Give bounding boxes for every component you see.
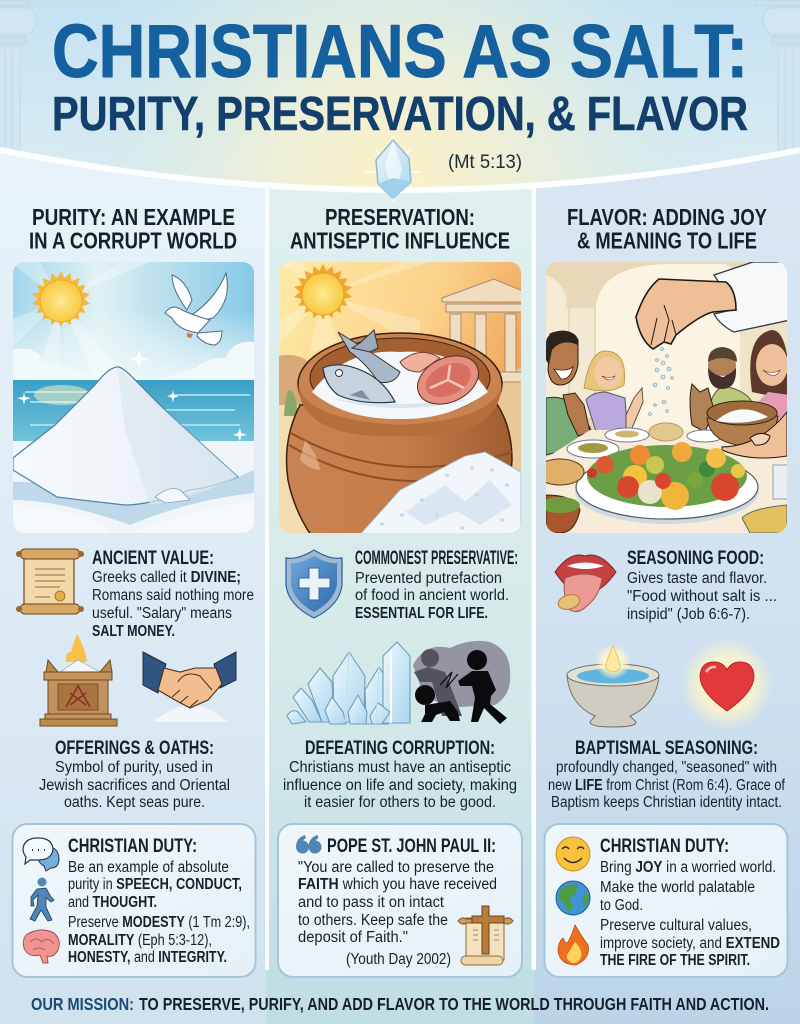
text: offerings and oaths: Symbol of purity, used in bbox=[55, 759, 213, 776]
panel: christian duty, flavor: Make the world palatable bbox=[600, 879, 755, 896]
panel: christian duty, purity: MORALITY (Eph 5:3-12), bbox=[68, 932, 212, 949]
text: defeating corruption bbox=[283, 738, 517, 811]
text: commonest preservative: COMMONEST PRESERVATIVE: bbox=[355, 548, 518, 569]
person left bbox=[546, 330, 592, 456]
icon: smiley bbox=[556, 837, 590, 871]
icon: baptismal font with flame bbox=[567, 644, 659, 727]
bearded man bbox=[690, 347, 752, 432]
column headings: & MEANING TO LIFE bbox=[577, 228, 757, 254]
dove bbox=[165, 273, 227, 345]
falling salt bbox=[648, 348, 673, 416]
sparkles bbox=[17, 350, 247, 442]
panel: pope quote: (Youth Day 2002) bbox=[346, 951, 451, 968]
column headings: IN A CORRUPT WORLD bbox=[29, 228, 237, 254]
clay pot bbox=[286, 404, 513, 533]
icon: glowing heart bbox=[681, 638, 773, 730]
text: commonest preservative: ESSENTIAL FOR LIFE. bbox=[355, 605, 488, 622]
text: seasoning food: "Food without salt is ... bbox=[627, 588, 777, 605]
text: defeating corruption: it easier for others to be good. bbox=[304, 794, 496, 811]
column headings: PRESERVATION: bbox=[325, 204, 475, 230]
side dishes bbox=[546, 458, 584, 486]
text: ancient value bbox=[92, 548, 254, 640]
panel: christian duty, flavor: Preserve cultural values, bbox=[600, 917, 752, 934]
table bbox=[546, 430, 787, 533]
column headings bbox=[29, 204, 767, 254]
salt bowl and hand bbox=[707, 401, 787, 458]
text: seasoning food: Gives taste and flavor. bbox=[627, 570, 767, 587]
icon: corruption figures bbox=[413, 641, 510, 724]
panel: pope quote: "You are called to preserve the bbox=[298, 859, 494, 876]
panel: christian duty, purity bbox=[12, 824, 256, 977]
icon: ancient scroll bbox=[16, 549, 84, 614]
icon: tongue with bread bbox=[555, 555, 616, 612]
text: ancient value: SALT MONEY. bbox=[92, 623, 175, 640]
panel: christian duty, purity: Preserve MODESTY (1 Tm 2:9), bbox=[68, 914, 250, 931]
panel: pope quote bbox=[278, 824, 522, 977]
icon: salt crystals bbox=[287, 642, 410, 724]
clouds bbox=[13, 342, 254, 379]
panel: christian duty, flavor: CHRISTIAN DUTY: bbox=[600, 836, 729, 857]
text: seasoning food: insipid" (Job 6:6-7). bbox=[627, 606, 750, 623]
icon: walking person bbox=[30, 878, 54, 921]
blonde woman bbox=[584, 351, 643, 440]
salt heap bbox=[360, 452, 521, 533]
text: offerings and oaths: Jewish sacrifices and Oriental bbox=[39, 777, 230, 794]
shore and puddle bbox=[13, 441, 254, 533]
text: offerings and oaths: oaths. Kept seas pure. bbox=[64, 794, 205, 811]
panel: christian duty, purity: HONESTY, and INTEGRITY. bbox=[68, 949, 227, 966]
text: defeating corruption: Christians must have an antiseptic bbox=[289, 759, 511, 776]
fish bbox=[323, 330, 400, 403]
panel: pope quote: FAITH which you have received bbox=[298, 876, 497, 893]
text: ancient value: Greeks called it DIVINE; bbox=[92, 569, 241, 586]
icon: salt crystal bbox=[365, 136, 421, 202]
panel: christian duty, purity: purity in SPEECH, CONDUCT, bbox=[68, 876, 242, 893]
footer: mission statement: OUR MISSION: bbox=[31, 994, 134, 1014]
text: ancient value: useful. "Salary" means bbox=[92, 605, 232, 622]
decorative columns bbox=[0, 0, 800, 156]
sea bbox=[13, 380, 254, 444]
panel: christian duty, purity: Be an example of absolute bbox=[68, 859, 229, 876]
woman right bbox=[750, 330, 790, 425]
panel: christian duty, flavor bbox=[544, 824, 788, 977]
text: baptismal seasoning bbox=[548, 738, 786, 811]
panel: preservation pot bbox=[279, 262, 526, 545]
temple bbox=[442, 279, 526, 382]
desert bbox=[279, 355, 308, 405]
hand and sleeve bbox=[636, 262, 795, 349]
text: offerings and oaths bbox=[39, 738, 230, 811]
panel: pope quote: to others. Keep safe the bbox=[298, 912, 448, 929]
icon: cross and scroll bbox=[458, 906, 513, 965]
panel: christian duty, flavor: to God. bbox=[600, 897, 643, 914]
column headings: ANTISEPTIC INFLUENCE bbox=[290, 228, 510, 254]
header banner bbox=[0, 0, 800, 190]
panel: christian duty, purity: CHRISTIAN DUTY: bbox=[68, 836, 197, 857]
icon: altar with salt bbox=[40, 634, 117, 726]
meat bbox=[399, 352, 479, 405]
panel: christian duty, flavor: THE FIRE OF THE SPIRIT. bbox=[600, 952, 750, 969]
text: ancient value: Romans said nothing more bbox=[92, 587, 254, 604]
sun bbox=[32, 271, 90, 327]
panel: christian duty, purity: and THOUGHT. bbox=[68, 894, 157, 911]
panel: salt mountain by the sea bbox=[10, 262, 254, 533]
panel: seasoning the meal bbox=[536, 262, 795, 533]
sun bbox=[294, 264, 352, 320]
icon: globe bbox=[556, 881, 590, 915]
text: seasoning food bbox=[627, 548, 777, 623]
icon: flame bbox=[558, 925, 588, 965]
text: commonest preservative bbox=[355, 548, 518, 622]
panel: christian duty, flavor: improve society, and EXTEND bbox=[600, 935, 780, 952]
text: defeating corruption: DEFEATING CORRUPTION: bbox=[305, 738, 495, 759]
icon: speech bubbles bbox=[23, 838, 59, 871]
icon: brain bbox=[23, 930, 59, 963]
icon: quotation marks bbox=[296, 835, 322, 854]
panel: pope quote: and to pass it on intact bbox=[298, 894, 445, 911]
icon: handshake over salt bbox=[143, 652, 236, 722]
panel: pope quote: deposit of Faith." bbox=[298, 929, 408, 946]
column headings: PURITY: AN EXAMPLE bbox=[32, 204, 235, 230]
salt pile bbox=[13, 367, 238, 505]
panel: christian duty, flavor: Bring JOY in a worried world. bbox=[600, 859, 776, 876]
text: defeating corruption: influence on life and society, making bbox=[283, 777, 517, 794]
text: offerings and oaths: OFFERINGS & OATHS: bbox=[55, 738, 214, 759]
text: ancient value: ANCIENT VALUE: bbox=[92, 548, 214, 569]
title bbox=[52, 9, 748, 141]
icon: shield with cross bbox=[286, 550, 342, 618]
scripture reference: (Mt 5:13) bbox=[448, 152, 522, 173]
panel: pope quote: POPE ST. JOHN PAUL II: bbox=[327, 836, 496, 857]
text: commonest preservative: of food in ancient world. bbox=[355, 587, 509, 604]
salad plate bbox=[575, 442, 759, 524]
text: commonest preservative: Prevented putrefaction bbox=[355, 570, 502, 587]
